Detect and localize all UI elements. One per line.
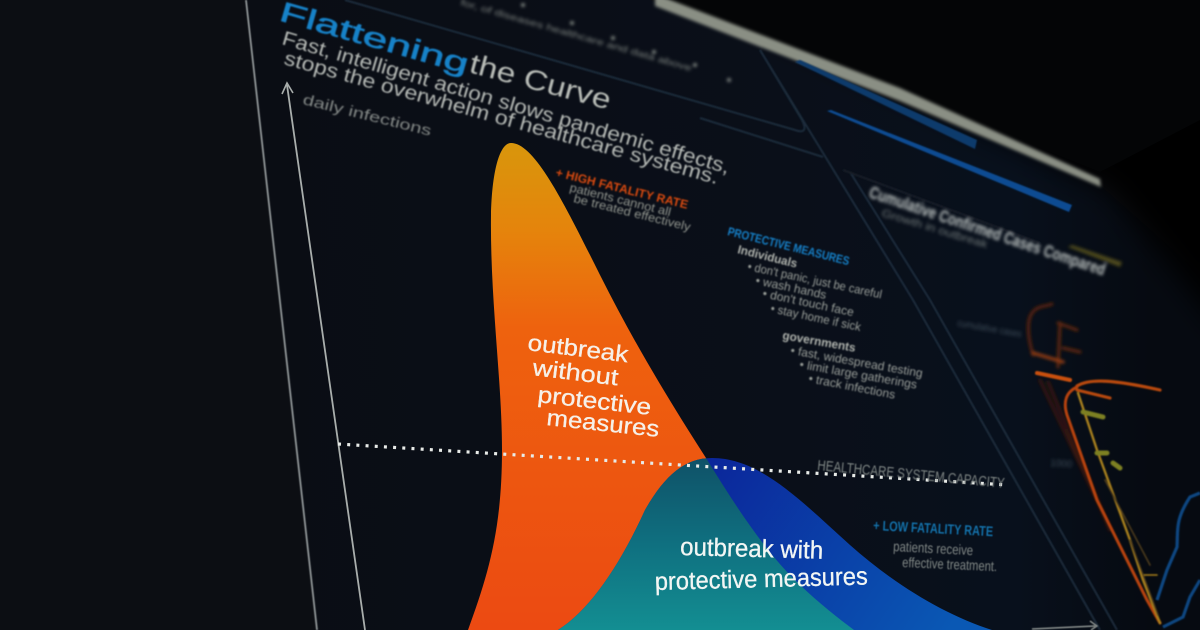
protective measures list: governments: [781, 328, 857, 355]
high fatality callout: [554, 165, 692, 234]
capacity dotted line: [338, 444, 1008, 485]
right chart: blue lines: [1157, 493, 1200, 627]
label: outbreak without protective measures: without: [530, 354, 621, 391]
right panel heading: Growth in outbreak: [880, 207, 989, 251]
right panel heading: Cumulative Confirmed Cases Compared: [867, 183, 1108, 279]
label: outbreak with protective measures: [654, 533, 868, 596]
low fatality callout: + LOW FATALITY RATE: [873, 517, 994, 539]
top bright bezel bar: [655, 0, 1101, 187]
high fatality callout: + HIGH FATALITY RATE: [554, 165, 690, 212]
label: outbreak with protective measures: protective measures: [654, 562, 868, 596]
title: [276, 0, 615, 115]
right chart small labels: [956, 318, 1073, 471]
high fatality callout: be treated effectively: [572, 191, 692, 234]
right chart: orange and yellow lines: [1037, 373, 1160, 623]
right chart small labels: cumulative cases: [956, 318, 1022, 340]
right chart: dim upper traces: [1028, 304, 1110, 530]
curve overlap: [558, 458, 854, 630]
protective measures list: PROTECTIVE MEASURES: [726, 224, 851, 268]
protective measures list: • track infections: [807, 371, 896, 402]
low fatality callout: effective treatment.: [902, 554, 997, 574]
y axis label: daily infections: [301, 91, 433, 140]
photographed infographic scene: [244, 0, 1200, 630]
screen panel: [246, 0, 1200, 630]
y axis arrow: [282, 83, 365, 630]
curve: outbreak without protective measures: [468, 143, 854, 630]
protective measures list: • wash hands: [754, 273, 828, 302]
x axis arrow: [1032, 621, 1097, 630]
top panel outlines: [345, 0, 1117, 630]
protective measures list: • limit large gatherings: [798, 357, 918, 392]
protective measures list: • don't panic, just be careful: [746, 259, 883, 301]
protective measures list: • fast, widespread testing: [789, 343, 924, 380]
protective measures list: Individuals: [736, 242, 799, 271]
label: outbreak without protective measures: outbreak: [526, 329, 630, 367]
label: outbreak without protective measures: protective: [536, 381, 653, 420]
title: the Curve: [466, 48, 615, 115]
low fatality callout: patients receive: [893, 538, 974, 558]
screen edge line: [246, 0, 317, 630]
label: outbreak with protective measures: outbreak with: [680, 533, 824, 565]
high fatality callout: patients cannot all: [568, 180, 673, 219]
low fatality callout: [873, 517, 997, 574]
right panel heading: [867, 183, 1122, 279]
protective measures list: • stay home if sick: [769, 301, 863, 334]
capacity label: HEALTHCARE SYSTEM CAPACITY: [817, 457, 1005, 492]
right chart small labels: 1000: [1050, 458, 1073, 471]
label: outbreak without protective measures: [526, 329, 661, 442]
label: outbreak without protective measures: measures: [545, 404, 661, 442]
dark top right corner: [670, 0, 1200, 340]
top summary text: [459, 0, 731, 82]
subtitle: Fast, intelligent action slows pandemic effects,: [280, 28, 732, 179]
curve: outbreak with protective measures: [558, 458, 992, 630]
protective measures list: • don't touch face: [761, 286, 856, 319]
protective measures list: [726, 224, 924, 402]
subtitle: stops the overwhelm of healthcare systems.: [282, 48, 721, 189]
blue header bars: [795, 60, 1072, 212]
